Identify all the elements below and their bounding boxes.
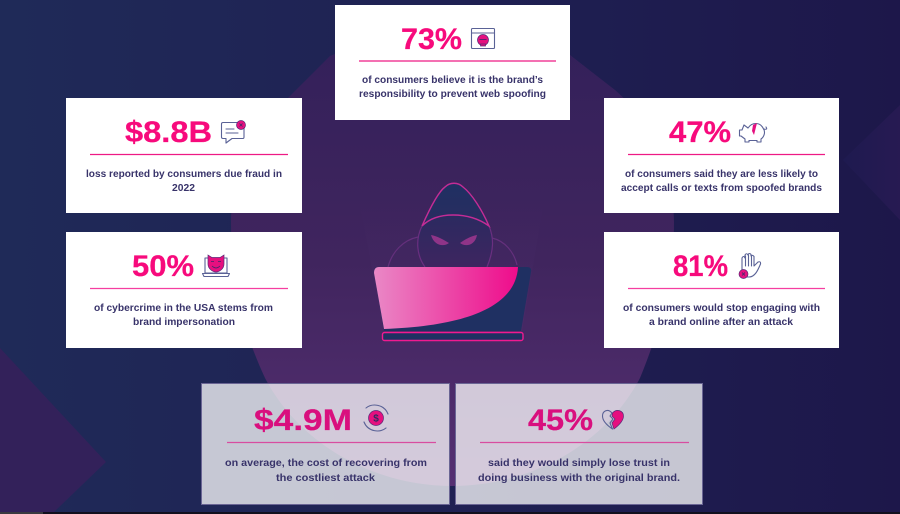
icon: circulating coin	[364, 405, 388, 431]
description: of consumers would stop engaging with	[623, 303, 820, 314]
description: a brand online after an attack	[649, 317, 793, 328]
icon: broken piggy bank	[740, 123, 767, 142]
description: doing business with the original brand.	[478, 473, 680, 484]
stat: $8.8B: $8.8B	[125, 116, 212, 149]
background diamond right	[843, 105, 900, 220]
icon: circulating coin: $	[373, 414, 379, 424]
icon: hand with alert	[739, 254, 761, 278]
bottom strip	[0, 512, 900, 514]
hacker hood	[422, 183, 489, 226]
panel: 47% calls or texts	[604, 98, 839, 213]
hacker eyes	[431, 235, 477, 245]
panel: 73% web spoofing	[335, 5, 570, 120]
description: of cybercrime in the USA stems from	[94, 303, 273, 314]
description	[225, 458, 427, 484]
icon: broken heart	[602, 410, 624, 429]
panel: $4.9M recovery cost	[202, 384, 450, 504]
stat: 45%: 45%	[528, 404, 593, 437]
description: said they would simply lose trust in	[488, 458, 670, 469]
stat: 50%: 50%	[132, 250, 194, 283]
panel: $8.8B loss	[66, 98, 302, 213]
stat: 73%: 73%	[401, 23, 462, 56]
description	[94, 303, 273, 328]
description: brand impersonation	[133, 317, 235, 328]
panel: 50% cybercrime	[66, 232, 302, 348]
description: of consumers believe it is the brand’s	[362, 75, 543, 86]
laptop back	[374, 267, 531, 331]
panel: 45% lose trust	[456, 384, 702, 504]
hacker face	[418, 215, 493, 267]
icon: chat bubble with alert	[222, 120, 246, 143]
stat: 47%: 47%	[669, 116, 731, 149]
description: accept calls or texts from spoofed brands	[621, 183, 822, 194]
stat: $4.9M: $4.9M	[254, 404, 352, 437]
face outline	[418, 226, 493, 267]
laptop screen highlight	[374, 267, 518, 329]
description: responsibility to prevent web spoofing	[359, 89, 546, 100]
hacker shoulders	[388, 237, 517, 267]
stat: 81%: 81%	[673, 250, 728, 283]
background circle	[231, 36, 674, 486]
icon: laptop with mask	[202, 255, 230, 276]
description	[621, 169, 822, 194]
description: on average, the cost of recovering from	[225, 458, 427, 469]
description: loss reported by consumers due fraud in	[86, 169, 282, 180]
light beam	[359, 200, 543, 331]
laptop base	[382, 332, 523, 340]
description: 2022	[172, 183, 195, 194]
description	[623, 303, 820, 328]
description: of consumers said they are less likely to	[625, 169, 818, 180]
description	[359, 75, 546, 100]
icon: browser with skull	[472, 28, 494, 48]
panel: 81% stop engaging	[604, 232, 839, 348]
background diamond left	[0, 348, 106, 512]
description	[478, 458, 680, 484]
description	[86, 169, 282, 194]
illustration: hacker at laptop	[359, 183, 543, 340]
description: the costliest attack	[276, 473, 375, 484]
